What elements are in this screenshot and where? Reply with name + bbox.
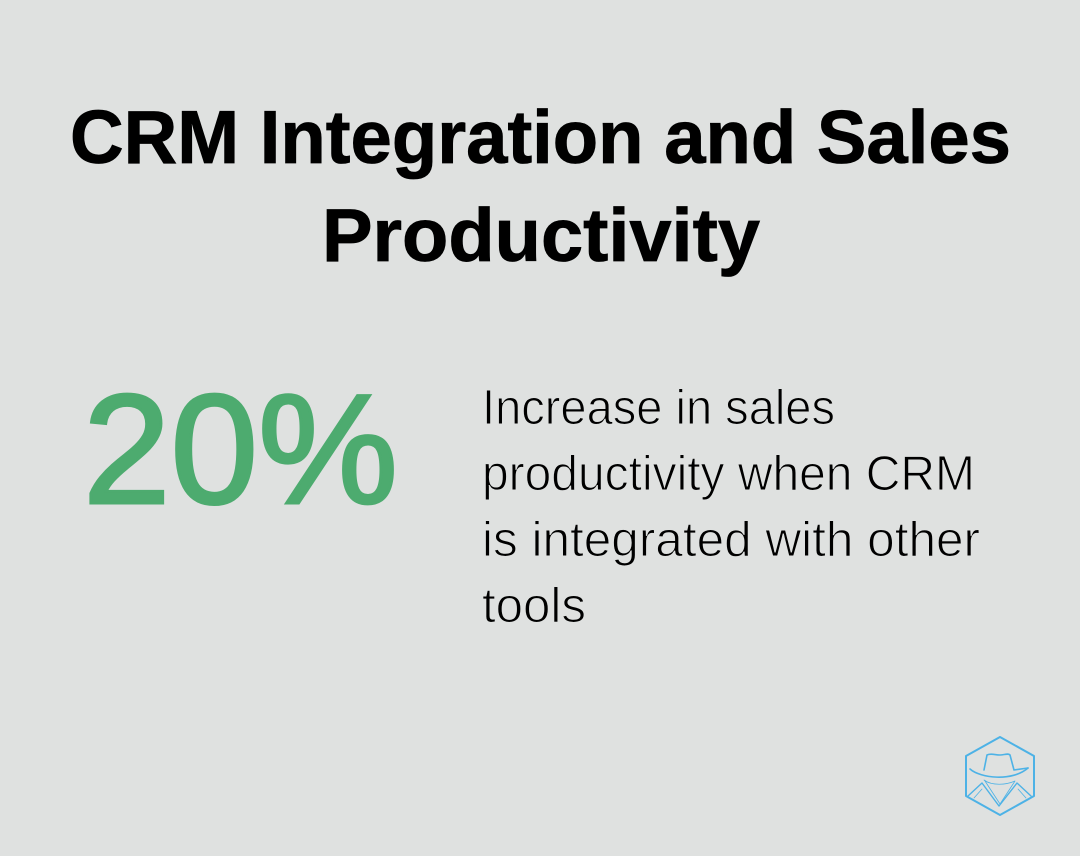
title: CRM Integration and Sales <box>70 95 1011 179</box>
icon: logo hexagon with hat-wearing spy <box>966 737 1034 815</box>
title: Productivity <box>322 193 760 277</box>
statistic: 20%: 20% <box>83 363 398 537</box>
description text: tools <box>482 579 586 633</box>
description text: Increase in sales <box>482 381 835 435</box>
description text <box>482 381 980 633</box>
description text: is integrated with other <box>482 513 980 567</box>
description text: productivity when CRM <box>482 447 975 501</box>
title <box>70 95 1011 277</box>
